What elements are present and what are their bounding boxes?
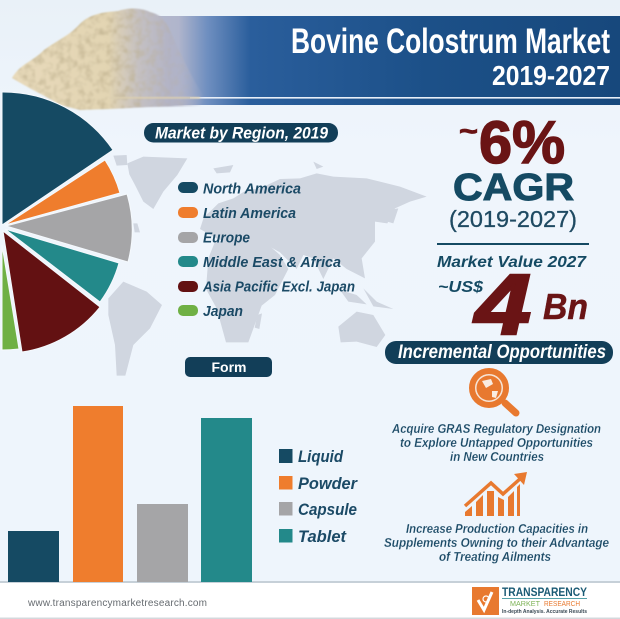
slice: Middle East and Africa	[5, 229, 119, 302]
logo: Transparency Market Research: MARKET	[510, 601, 541, 608]
legend item: Liquid: Liquid	[298, 447, 344, 466]
legend: form	[279, 447, 358, 546]
text: GRAS opportunity: to Explore Untapped Opportunities	[400, 435, 593, 450]
divider	[437, 243, 589, 245]
stat: 6% CAGR: CAGR	[453, 167, 574, 209]
slice: Latin America	[5, 160, 120, 225]
title	[291, 22, 610, 91]
legend item: Middle East and Africa: Middle East & Africa	[203, 254, 341, 271]
stat: 6% CAGR: ~	[459, 115, 478, 148]
stat: market value 2027: Bn	[543, 286, 588, 327]
legend item: Tablet: Tablet	[298, 527, 347, 546]
legend item: Latin America: Latin America	[203, 205, 296, 222]
legend item: Europe: Europe	[203, 230, 250, 246]
legend item: Powder: Powder	[298, 474, 358, 493]
logo: Transparency Market Research: In-depth Analysis. Accurate Results	[502, 609, 587, 615]
bar: Tablet	[201, 418, 252, 582]
heading pill: Form	[185, 357, 272, 377]
icon: magnifier with globe	[472, 371, 516, 413]
stat: market value 2027: ~US$	[438, 279, 484, 296]
slice: Europe	[6, 194, 132, 262]
bottom footer background	[0, 581, 620, 619]
stat: market value 2027	[437, 254, 588, 353]
legend item: Japan: Japan	[203, 303, 243, 320]
bar chart: form	[8, 406, 252, 582]
text: production capacities opportunity	[384, 521, 609, 564]
stat: market value 2027: 4	[473, 258, 531, 353]
bar: Capsule	[137, 504, 188, 582]
legend: regions	[178, 180, 355, 320]
slice: Japan	[2, 245, 19, 350]
slice: North America	[2, 92, 113, 225]
heading pill: Form: Form	[212, 359, 246, 375]
stat: 6% CAGR	[449, 109, 577, 232]
heading pill: Market by Region: Market by Region, 2019	[155, 124, 329, 142]
logo: Transparency Market Research	[472, 587, 587, 615]
text: GRAS opportunity: in New Countries	[450, 449, 544, 464]
icon: rising bar chart with arrow	[465, 472, 527, 516]
logo: Transparency Market Research: TRANSPARENCY	[502, 587, 587, 599]
pie chart	[2, 92, 132, 352]
image: powder pile	[12, 8, 205, 110]
header band	[158, 16, 620, 105]
legend item: Asia Pacific Excl. Japan: Asia Pacific Excl. Japan	[202, 278, 355, 296]
legend item: Europe	[178, 230, 250, 246]
logo mark	[472, 587, 499, 615]
slice: Asia Pacific Excl. Japan	[3, 231, 100, 352]
legend item: Japan	[178, 303, 243, 320]
website url: www.transparencymarketresearch.com	[27, 598, 207, 609]
stat: 6% CAGR: (2019-2027)	[449, 206, 577, 232]
logo: Transparency Market Research: RESEARCH	[544, 601, 580, 608]
legend item: Capsule: Capsule	[298, 500, 357, 519]
bar: Powder	[73, 406, 123, 582]
stat: 6% CAGR: 6%	[479, 109, 565, 176]
text: production capacities opportunity: Increase Production Capacities in	[406, 521, 588, 536]
text: GRAS opportunity	[391, 421, 601, 464]
bar: Liquid	[8, 531, 59, 582]
stat: market value 2027: Market Value 2027	[437, 254, 588, 271]
text: production capacities opportunity: of Treating Ailments	[439, 549, 551, 564]
world map	[108, 155, 427, 376]
legend item: North America: North America	[203, 180, 301, 198]
